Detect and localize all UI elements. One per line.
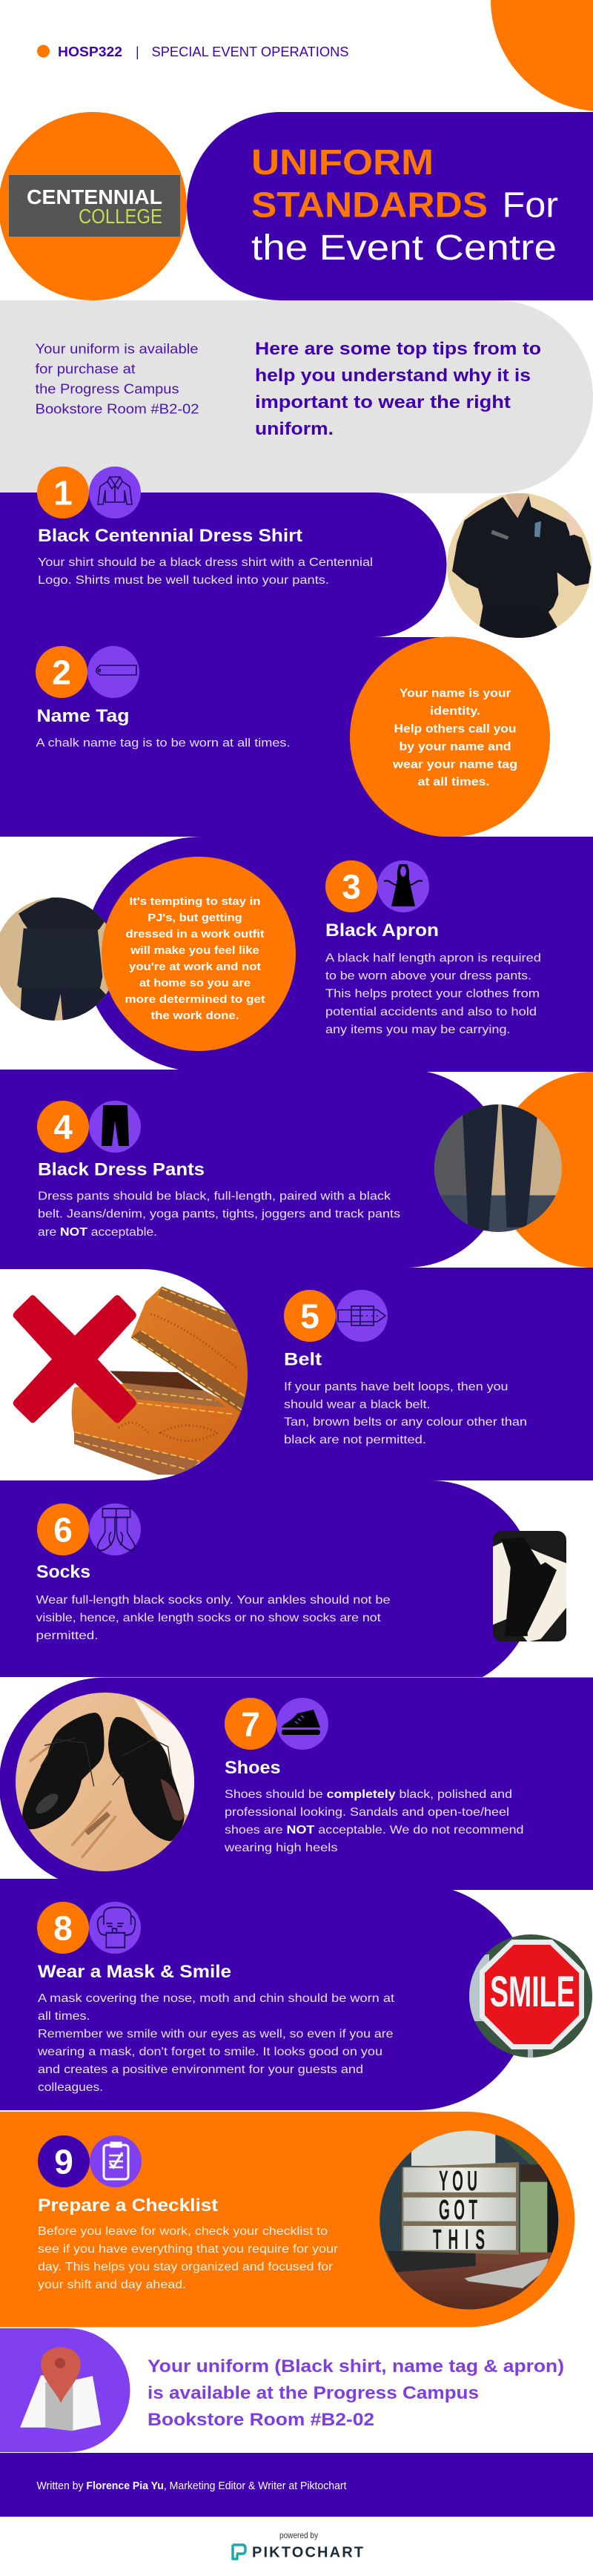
heading: Black Apron [325, 920, 439, 941]
photo: you got this sign: THIS [433, 2224, 485, 2256]
panel: 5 belt [0, 1268, 593, 1480]
body text: black are not permitted. [284, 1434, 426, 1446]
icon: belt [336, 1290, 388, 1342]
decorative orange corner circle [491, 0, 593, 111]
body text: Remember we smile with our eyes as well, so even if you are [38, 2028, 394, 2040]
icon: apron [377, 860, 429, 912]
purchase information text: the Progress Campus [36, 381, 179, 396]
body text [38, 1190, 400, 1239]
body text [224, 1788, 523, 1854]
body text: Wear full-length black socks only. Your ankles should not be [36, 1594, 391, 1607]
photo: apron [0, 897, 108, 1021]
callout: name is your identity: Your name is your [400, 687, 511, 700]
icon: name tag [87, 646, 139, 698]
badge: number 2: 2 [52, 653, 71, 691]
callout: dressing for work [102, 857, 296, 1051]
intro tips text [255, 339, 541, 439]
powered by Piktochart: PIKTOCHART [252, 2545, 363, 2561]
heading: Shoes [225, 1758, 280, 1778]
body text [38, 2225, 339, 2291]
badge: number 1: 1 [53, 473, 73, 512]
body text [38, 556, 373, 587]
location text: is available at the Progress Campus [148, 2383, 479, 2403]
heading: Name Tag [37, 706, 129, 726]
callout: dressing for work: the work done. [151, 1009, 239, 1022]
panel: 4 black dress pants [0, 1070, 593, 1268]
body text: shoes are NOT acceptable. We do not recommend [225, 1824, 523, 1837]
badge: number 1 [37, 467, 89, 518]
course header: | [136, 45, 139, 59]
badge: number 8 [37, 1902, 89, 1954]
body text: Your shirt should be a black dress shirt with a Centennial [38, 556, 373, 569]
body text: visible, hence, ankle length socks or no show socks are not [36, 1612, 381, 1624]
decorative orange circle [495, 1072, 593, 1268]
body text: A black half length apron is required [325, 952, 541, 964]
title text: For [503, 185, 558, 225]
body text: colleagues. [38, 2081, 103, 2094]
body text: your shift and day ahead. [38, 2279, 186, 2291]
badge: number 7 [225, 1698, 276, 1750]
body text: wearing high heels [224, 1842, 338, 1854]
panel: 2 name tag [0, 636, 550, 837]
panel: 9 prepare a checklist [0, 2112, 574, 2328]
callout: name is your identity [350, 636, 550, 837]
body text: any items you may be carrying. [325, 1024, 510, 1036]
body text: Shoes should be completely black, polished and [225, 1788, 512, 1801]
course header: HOSP322 [58, 45, 122, 59]
icon: pants [89, 1101, 141, 1153]
icon: checklist [90, 2135, 142, 2187]
body text: Tan, brown belts or any colour other than [284, 1416, 527, 1429]
heading: Belt [284, 1350, 322, 1369]
location text [148, 2356, 564, 2430]
purchase information text: for purchase at [36, 362, 135, 377]
callout: dressing for work: more determined to get [125, 993, 265, 1006]
photo: dress pants [434, 1104, 562, 1232]
panel: 3 black apron [0, 837, 593, 1072]
body text: A chalk name tag is to be worn at all times. [36, 737, 291, 749]
panel: 6 socks [0, 1480, 567, 1691]
purchase information text: Bookstore Room #B2-02 [36, 402, 199, 417]
footer band [0, 2453, 593, 2517]
body text [325, 952, 541, 1036]
intro tips text: important to wear the right [255, 392, 511, 412]
badge: number 9: 9 [54, 2142, 73, 2181]
body text: Dress pants should be black, full-length, paired with a black [38, 1190, 391, 1203]
footer band: Written by Florence Pia Yu, Marketing Editor & Writer at Piktochart [37, 2480, 347, 2492]
body text [37, 1992, 395, 2094]
purchase information text [36, 341, 199, 417]
panel: location [0, 2328, 564, 2452]
photo: you got this sign: YOU [439, 2166, 477, 2197]
body text [284, 1381, 527, 1446]
heading: Prepare a Checklist [38, 2195, 218, 2216]
badge: number 5: 5 [300, 1297, 319, 1335]
intro tips text: help you understand why it is [255, 366, 531, 386]
body text: to be worn above your dress pants. [325, 970, 531, 982]
body text: potential accidents and also to hold [325, 1006, 537, 1018]
callout: name is your identity: at all times. [418, 776, 489, 788]
badge: number 4: 4 [53, 1108, 73, 1147]
heading: Black Dress Pants [38, 1160, 205, 1179]
purchase information text: Your uniform is available [36, 341, 199, 356]
icon: mask [89, 1902, 141, 1954]
powered by Piktochart [233, 2530, 363, 2561]
callout: dressing for work: It's tempting to stay in [129, 895, 261, 908]
body text: Logo. Shirts must be well tucked into your pants. [38, 574, 329, 587]
badge: number 8: 8 [53, 1909, 73, 1948]
body text: Before you leave for work, check your checklist to [38, 2225, 328, 2238]
intro tips text: Here are some top tips from to [255, 339, 541, 359]
badge: number 3 [325, 860, 377, 912]
badge: number 2 [36, 646, 87, 698]
title text: STANDARDS [251, 185, 488, 225]
body text: permitted. [36, 1630, 98, 1642]
body text: day. This helps you stay organized and focused for [38, 2261, 334, 2273]
badge: number 3: 3 [342, 868, 361, 906]
body text: professional looking. Sandals and open-toe/heel [225, 1806, 509, 1819]
location text: Bookstore Room #B2-02 [148, 2410, 374, 2430]
callout: dressing for work: at home so you are [139, 977, 251, 989]
badge: number 6 [37, 1503, 89, 1555]
photo: you got this sign: GOT [439, 2195, 477, 2226]
badge: number 6: 6 [53, 1510, 73, 1549]
callout: name is your identity: by your name and [399, 740, 511, 754]
logo: Centennial College [0, 112, 187, 300]
title text: the Event Centre [251, 228, 557, 268]
icon: map pin [20, 2347, 101, 2431]
body text: and creates a positive environment for your guests and [38, 2063, 363, 2076]
body text: A mask covering the nose, moth and chin should be worn at [38, 1992, 395, 2005]
icon: shirt [89, 467, 141, 518]
body text: wearing a mask, don't forget to smile. It looks good on you [37, 2046, 382, 2058]
icon: socks [89, 1503, 141, 1555]
callout: name is your identity: identity. [430, 705, 480, 718]
title text: UNIFORM [251, 143, 434, 182]
body text: This helps protect your clothes from [325, 988, 540, 1000]
logo: Centennial College: CENTENNIAL [27, 185, 162, 208]
panel: title [187, 112, 593, 300]
location text: Your uniform (Black shirt, name tag & apron) [148, 2356, 564, 2376]
body text [36, 1594, 391, 1642]
panel: 8 mask and smile [0, 1879, 593, 2110]
callout: name is your identity: wear your name tag [392, 758, 517, 771]
icon: shoe [276, 1698, 328, 1750]
course header [37, 45, 348, 59]
body text: are NOT acceptable. [38, 1226, 157, 1239]
callout: name is your identity: Help others call you [394, 722, 516, 736]
badge: number 9 [38, 2135, 90, 2187]
logo: Centennial College: COLLEGE [79, 205, 162, 228]
badge: number 5 [284, 1290, 336, 1342]
panel: introduction [0, 300, 593, 493]
body text: see if you have everything that you require for your [38, 2243, 339, 2256]
photo: tan belt [72, 1286, 250, 1475]
course header: SPECIAL EVENT OPERATIONS [151, 45, 348, 59]
callout: dressing for work: you're at work and not [129, 961, 261, 973]
panel: 1 black dress shirt [0, 467, 593, 642]
photo: you got this sign [377, 2129, 562, 2312]
panel: 7 shoes [0, 1677, 593, 1890]
body text: all times. [38, 2010, 90, 2023]
white photo backing [0, 1269, 248, 1480]
heading: Black Centennial Dress Shirt [38, 526, 302, 546]
body text: If your pants have belt loops, then you [284, 1381, 508, 1393]
photo: black shoes [13, 1690, 198, 1875]
photo: dress shirt [445, 491, 593, 642]
callout: dressing for work: dressed in a work outfit [126, 928, 264, 941]
heading: Socks [36, 1562, 90, 1582]
intro tips text: uniform. [255, 419, 334, 439]
photo: black socks [491, 1529, 567, 1643]
badge: number 4 [37, 1101, 89, 1153]
badge: number 7: 7 [241, 1704, 260, 1743]
callout: dressing for work: PJ's, but getting [148, 912, 242, 924]
photo: smile stop sign [467, 1932, 593, 2062]
heading: Wear a Mask & Smile [38, 1962, 231, 1982]
icon: red cross mark [13, 1295, 136, 1423]
powered by Piktochart: powered by [279, 2530, 318, 2540]
body text: should wear a black belt. [284, 1399, 430, 1411]
body text: belt. Jeans/denim, yoga pants, tights, joggers and track pants [38, 1208, 400, 1221]
title text [251, 143, 558, 268]
callout: dressing for work: will make you feel like [130, 944, 259, 957]
